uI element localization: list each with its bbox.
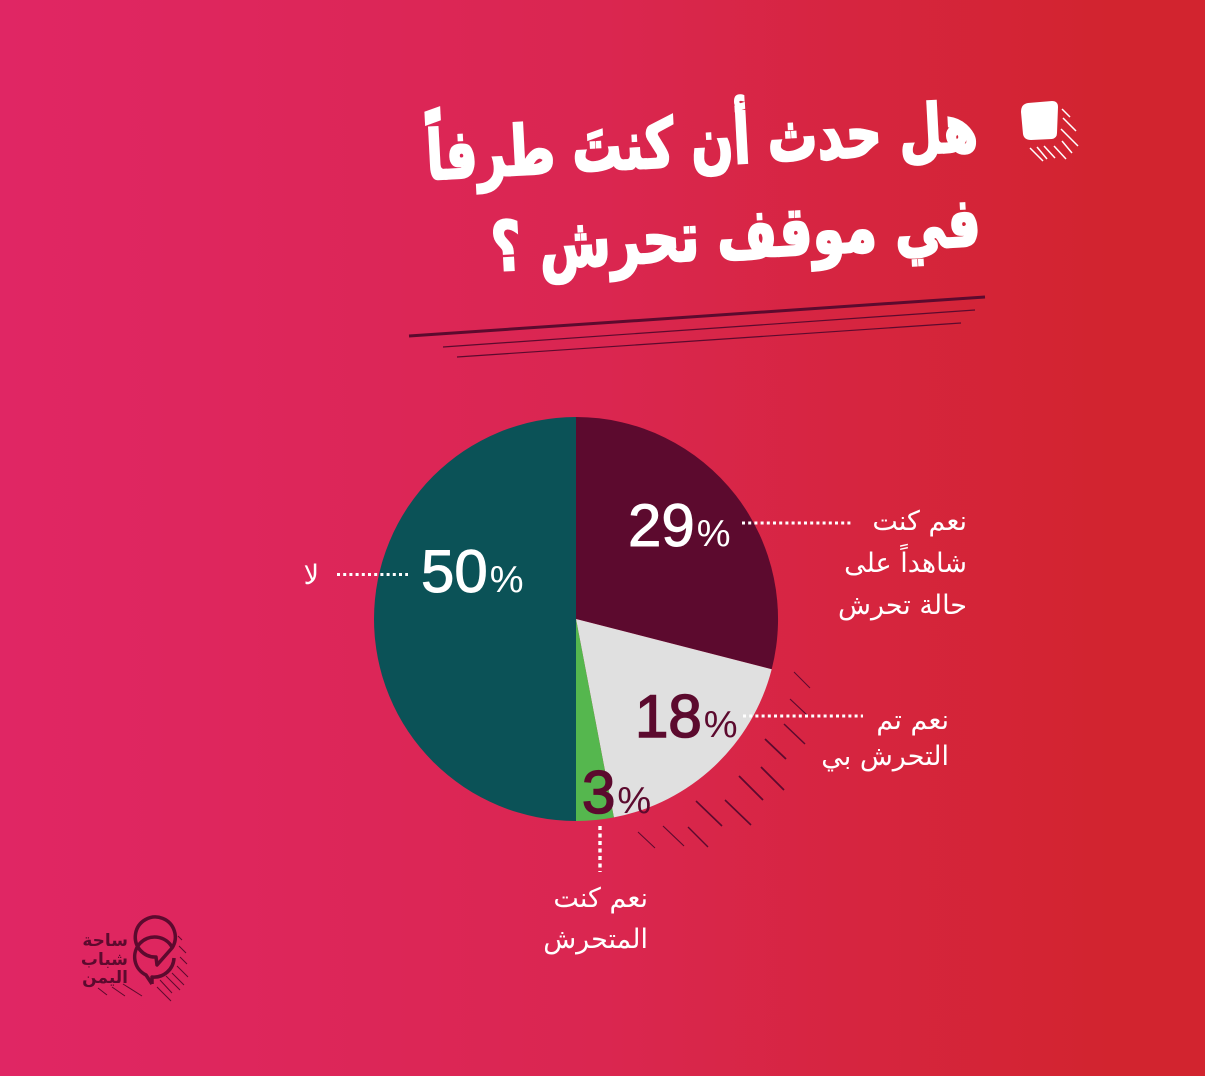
logo wordmark: اليمن	[82, 968, 128, 988]
title line 2: في موقف تحرش ؟	[489, 183, 982, 288]
value: 3%: 3%	[582, 759, 651, 826]
logo wordmark: ساحة	[82, 931, 128, 951]
title line 1: هل حدث أن كنتَ طرفاً	[424, 79, 979, 197]
label: witness: نعم كنت	[872, 506, 967, 537]
slice: 29% witness	[576, 417, 778, 669]
label: harassed	[821, 705, 949, 772]
leader line: 29%	[742, 522, 851, 524]
title	[424, 79, 982, 288]
label: harassed: نعم تم	[876, 705, 949, 736]
label: harasser: المتحرش	[543, 924, 648, 955]
value: 29%: 29%	[628, 492, 731, 559]
leader line: 3%	[598, 826, 602, 872]
slice: 50% no	[374, 417, 576, 821]
logo wordmark: شباب	[81, 950, 128, 970]
slice: 3% harasser	[576, 619, 614, 821]
title underlines	[409, 297, 985, 357]
slice: 18% harassed	[576, 619, 772, 817]
label: witness	[838, 506, 967, 621]
label: witness: حالة تحرش	[838, 590, 967, 621]
value: 18%: 18%	[635, 683, 738, 750]
label: harassed: التحرش بي	[821, 741, 949, 772]
icon: white rounded square with hatching	[1021, 101, 1078, 161]
label: no: لا	[304, 560, 319, 591]
value: 50%: 50%	[421, 538, 524, 605]
label: witness: شاهداً على	[844, 543, 967, 579]
leader line: 50%	[337, 573, 408, 576]
logo	[81, 917, 188, 1001]
label: harasser: نعم كنت	[553, 883, 648, 914]
pie chart	[374, 417, 778, 821]
hatching beside the pie	[638, 672, 810, 848]
label: harasser	[543, 883, 648, 955]
logo wordmark	[81, 931, 128, 988]
logo speech bubbles	[135, 917, 175, 984]
logo hatching	[98, 936, 188, 1001]
leader line: 18%	[743, 714, 863, 718]
